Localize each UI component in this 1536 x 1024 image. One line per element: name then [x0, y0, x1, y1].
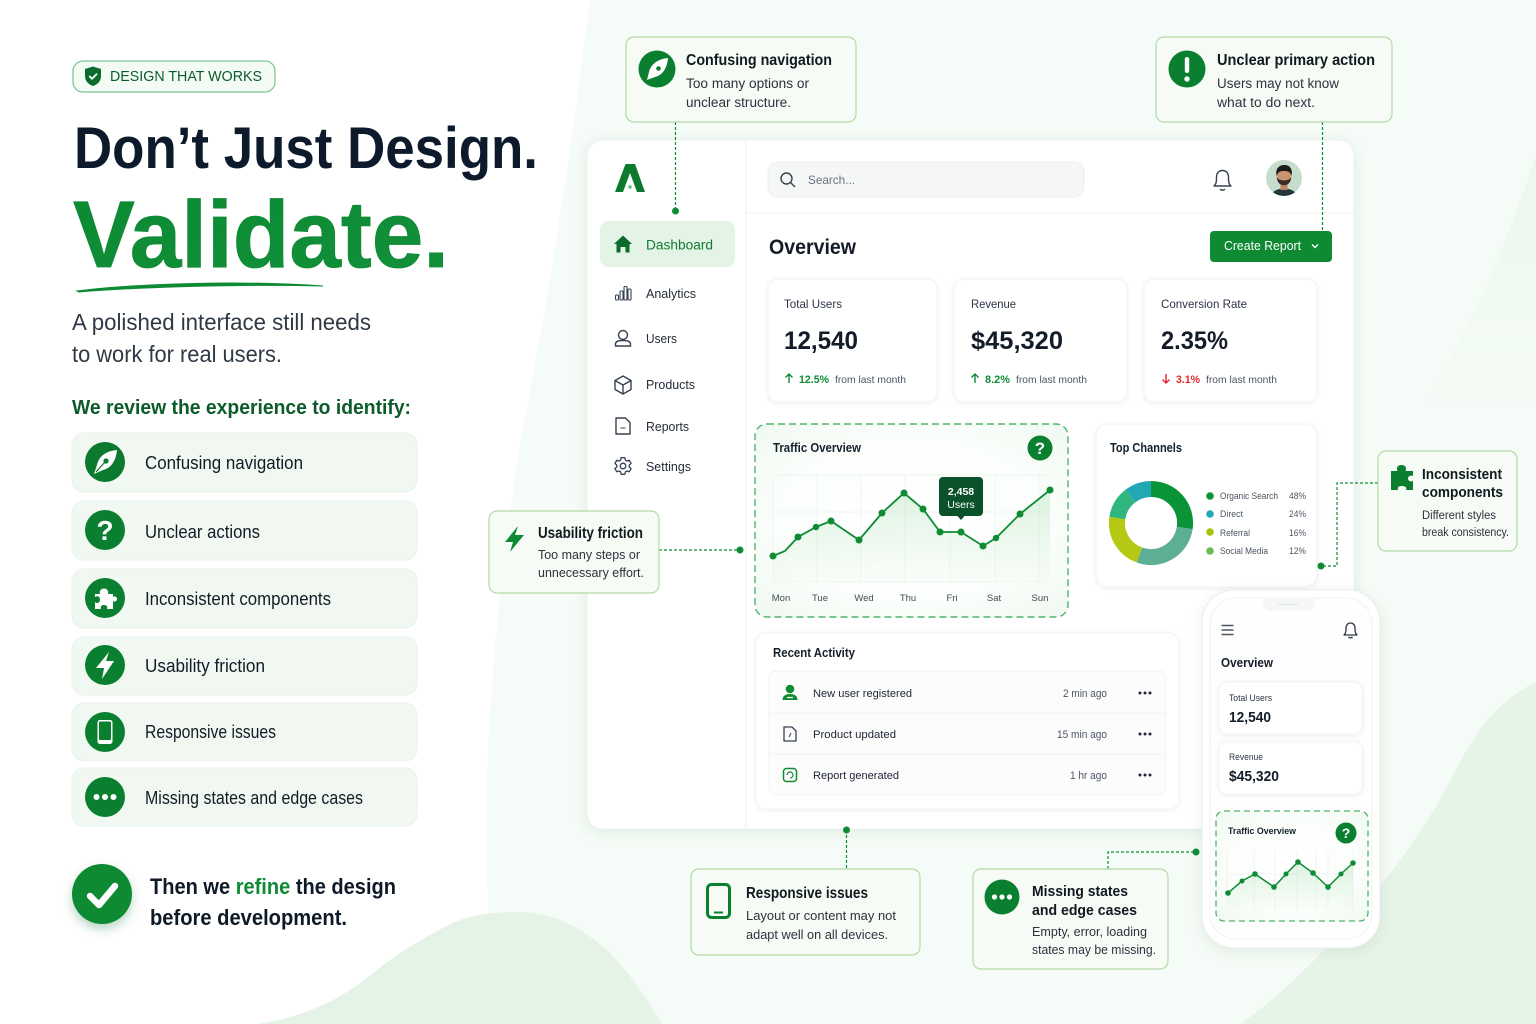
row: new user: New user registered — [813, 688, 912, 700]
line chart — [770, 475, 1054, 604]
x axis labels: Wed — [854, 593, 874, 604]
x axis labels: Fri — [946, 593, 958, 604]
kpi: revenue: 8.2% — [985, 374, 1010, 386]
callout: responsive issues: Layout or content may not — [746, 908, 896, 923]
button: create report — [1210, 231, 1332, 262]
legend: Organic Search — [1220, 491, 1278, 501]
nav: reports: Reports — [646, 419, 689, 434]
row: report generated: Report generated — [813, 770, 899, 782]
callout: usability friction — [489, 511, 659, 593]
avatar — [1266, 160, 1302, 198]
search bar: Search... — [808, 173, 855, 187]
subtitle: A polished interface still needs — [72, 309, 371, 335]
callout: usability friction: Too many steps or — [538, 548, 640, 562]
tooltip — [939, 477, 983, 520]
callout: responsive issues — [691, 869, 920, 955]
item: usability friction: Usability friction — [145, 656, 265, 676]
icon: bell — [1214, 170, 1231, 190]
panel: traffic overview: Traffic Overview — [773, 441, 861, 455]
legend: Direct — [1220, 509, 1243, 519]
search bar — [768, 162, 1084, 197]
kpi: revenue — [954, 279, 1127, 402]
panel: top channels: Top Channels — [1110, 441, 1182, 455]
callout: inconsistent components: break consistency. — [1422, 527, 1509, 539]
badge: design that works: DESIGN THAT WORKS — [110, 68, 262, 85]
kpi: revenue: Revenue — [971, 297, 1016, 311]
item: unclear actions: Unclear actions — [145, 522, 260, 542]
section heading: We review the experience to identify: — [72, 396, 411, 419]
legend: Referral — [1220, 528, 1250, 538]
card: phone revenue: Revenue — [1229, 752, 1263, 762]
dashboard panel — [587, 140, 1354, 829]
card: phone total users: Total Users — [1229, 693, 1272, 703]
legend: Social Media — [1220, 546, 1268, 556]
connector: inconsistent components — [1318, 483, 1378, 570]
item: missing states: Missing states and edge cases — [145, 788, 363, 808]
row: product updated: 15 min ago — [1057, 729, 1107, 741]
callout: usability friction: Usability friction — [538, 525, 643, 542]
button: create report: Create Report — [1224, 239, 1302, 253]
item: inconsistent components: Inconsistent components — [145, 589, 331, 609]
kpi: total users: from last month — [835, 374, 906, 386]
callout: responsive issues: Responsive issues — [746, 885, 868, 902]
row: product updated — [784, 727, 1152, 741]
nav: analytics: Analytics — [646, 286, 696, 301]
connector: responsive issues — [843, 826, 850, 869]
panel: top channels — [1096, 424, 1317, 587]
callout: confusing navigation: Confusing navigation — [686, 52, 832, 69]
item: usability friction — [72, 637, 417, 695]
callout: unclear primary action: Users may not know — [1217, 76, 1339, 91]
panel: recent activity — [756, 633, 1179, 809]
callout: missing states: and edge cases — [1032, 902, 1137, 919]
callout: missing states: Empty, error, loading — [1032, 924, 1147, 939]
checklist — [72, 433, 417, 826]
nav: products: Products — [646, 377, 695, 392]
callout: missing states: Missing states — [1032, 883, 1128, 900]
tooltip: Users — [947, 499, 975, 511]
callout: unclear primary action: what to do next. — [1216, 95, 1315, 110]
legend: 24% — [1289, 509, 1306, 519]
panel: phone traffic overview: Traffic Overview — [1228, 826, 1297, 837]
legend: 16% — [1289, 528, 1306, 538]
subtitle — [72, 309, 371, 367]
callout: usability friction: unnecessary effort. — [538, 566, 644, 580]
phone mockup — [1202, 590, 1380, 948]
kpi: total users — [768, 279, 937, 402]
kpi: conversion rate: 3.1% — [1176, 374, 1200, 386]
x axis labels — [772, 593, 1048, 604]
nav: products — [615, 376, 695, 394]
heading: phone overview: Overview — [1221, 655, 1274, 670]
panel: phone traffic overview: ? — [1342, 825, 1350, 841]
kpi: total users: 12,540 — [784, 327, 858, 355]
nav: users: Users — [646, 331, 677, 346]
kpi: conversion rate: from last month — [1206, 374, 1277, 386]
row: product updated: Product updated — [813, 729, 896, 741]
item: confusing navigation: Confusing navigation — [145, 453, 303, 473]
kpi: total users: Total Users — [784, 297, 842, 311]
callout: inconsistent components: Inconsistent — [1422, 467, 1502, 483]
x axis labels: Sat — [987, 593, 1001, 604]
row: new user: 2 min ago — [1063, 688, 1107, 700]
row: new user — [782, 685, 1152, 700]
panel: traffic overview — [755, 424, 1068, 617]
card: phone total users: 12,540 — [1229, 710, 1271, 726]
item: unclear actions — [72, 501, 417, 560]
callout: unclear primary action: Unclear primary action — [1217, 52, 1375, 69]
tooltip: 2,458 — [948, 486, 974, 498]
panel: phone traffic overview — [1216, 811, 1368, 921]
legend — [1206, 491, 1306, 556]
card: phone revenue — [1219, 742, 1362, 794]
subtitle: to work for real users. — [72, 341, 282, 367]
item: unclear actions: ? — [96, 515, 114, 546]
logo — [615, 164, 645, 192]
nav: dashboard — [600, 221, 735, 267]
card: phone total users — [1219, 682, 1362, 734]
connector: usability friction — [659, 546, 744, 554]
x axis labels: Tue — [812, 593, 828, 604]
row: report generated — [784, 768, 1152, 782]
phone line chart — [1225, 851, 1356, 910]
nav: users — [616, 330, 677, 346]
icon: shield check — [85, 66, 101, 86]
item: responsive issues — [72, 703, 417, 761]
legend: 48% — [1289, 491, 1306, 501]
badge: design that works — [73, 61, 275, 92]
callout: missing states: states may be missing. — [1032, 942, 1156, 957]
callout: confusing navigation — [626, 37, 856, 122]
nav: dashboard: Dashboard — [646, 238, 713, 252]
icon: phone bell — [1344, 623, 1357, 638]
kpi: revenue: $45,320 — [971, 327, 1063, 355]
connector: primary action — [1322, 122, 1324, 230]
closing statement: before development. — [150, 905, 347, 930]
connector: missing states — [1108, 848, 1200, 869]
heading: overview: Overview — [769, 236, 857, 259]
donut chart — [1117, 489, 1185, 557]
item: confusing navigation — [72, 433, 417, 492]
icon: check circle — [72, 864, 132, 924]
nav: settings — [615, 458, 691, 474]
callout: missing states — [973, 869, 1168, 969]
row: report generated: 1 hr ago — [1070, 770, 1107, 782]
callout: confusing navigation: unclear structure. — [686, 95, 791, 110]
connector: navigation — [672, 122, 679, 214]
callout: inconsistent components: components — [1422, 485, 1503, 501]
kpi: conversion rate: 2.35% — [1161, 327, 1228, 355]
nav: analytics — [616, 286, 696, 301]
icon: question: ? — [1035, 439, 1045, 458]
title: Validate. — [73, 182, 449, 288]
item: inconsistent components — [72, 569, 417, 628]
title — [73, 116, 538, 292]
card: phone revenue: $45,320 — [1229, 769, 1279, 785]
nav: settings: Settings — [646, 459, 691, 474]
x axis labels: Mon — [772, 593, 790, 604]
callout: responsive issues: adapt well on all devices. — [746, 927, 888, 942]
icon: menu — [1222, 626, 1234, 634]
icon: question — [1028, 436, 1052, 460]
panel: recent activity: Recent Activity — [773, 646, 855, 660]
sidebar navigation — [600, 221, 735, 474]
closing statement: Then we refine the design — [150, 874, 396, 899]
x axis labels: Sun — [1032, 593, 1048, 604]
kpi: revenue: from last month — [1016, 374, 1087, 386]
item: missing states — [72, 768, 417, 826]
item: responsive issues: Responsive issues — [145, 722, 276, 742]
kpi: conversion rate: Conversion Rate — [1161, 297, 1247, 311]
kpi: conversion rate — [1144, 279, 1317, 402]
callout: confusing navigation: Too many options or — [686, 76, 809, 91]
kpi: total users: 12.5% — [799, 374, 829, 386]
callout: inconsistent components: Different styles — [1422, 510, 1496, 522]
callout: inconsistent components — [1378, 451, 1517, 551]
closing statement — [72, 864, 396, 930]
nav: reports — [616, 418, 689, 434]
x axis labels: Thu — [900, 593, 916, 604]
title: Don’t Just Design. — [74, 116, 538, 181]
legend: 12% — [1289, 546, 1306, 556]
callout: unclear primary action — [1156, 37, 1392, 122]
